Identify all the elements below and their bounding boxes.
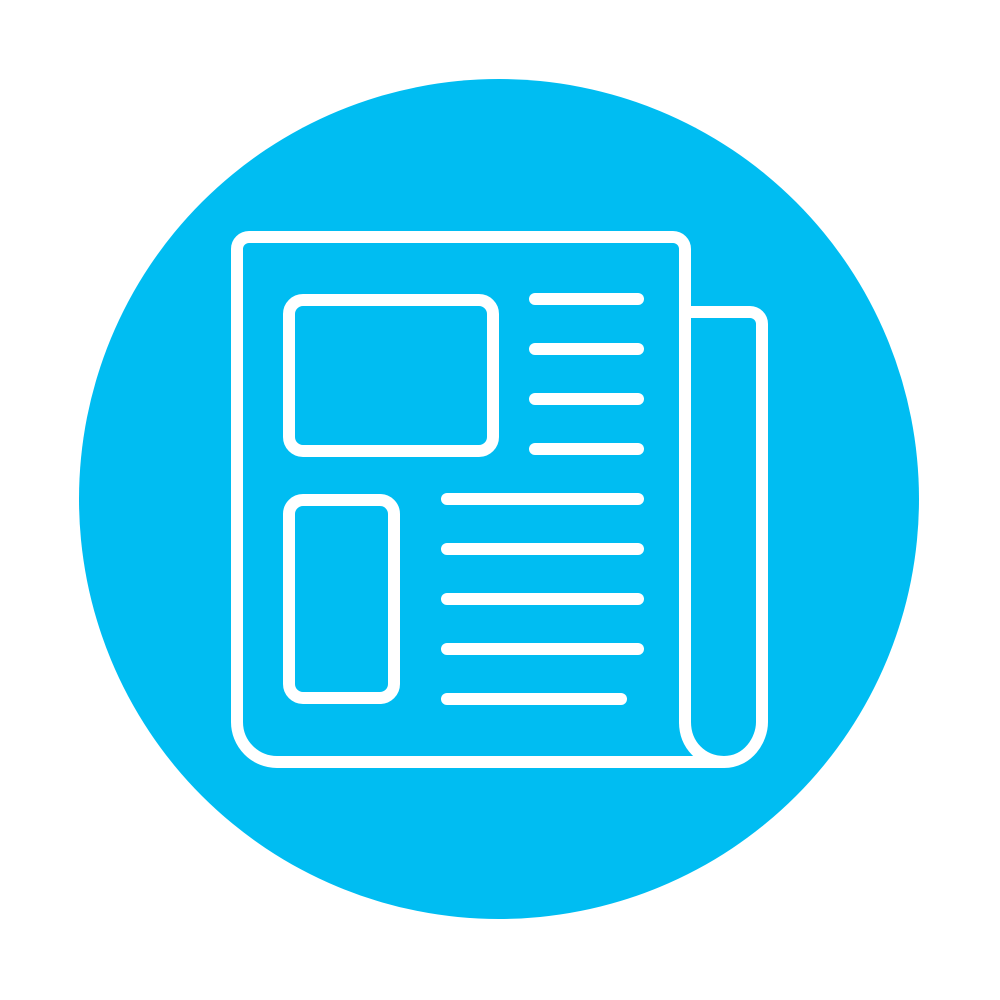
image box top (289, 300, 493, 451)
background circle (79, 79, 919, 919)
newspaper icon (237, 237, 762, 762)
text lines (447, 299, 638, 699)
rolled back page (685, 312, 762, 762)
page outline (237, 237, 722, 762)
image box bottom (289, 500, 394, 698)
